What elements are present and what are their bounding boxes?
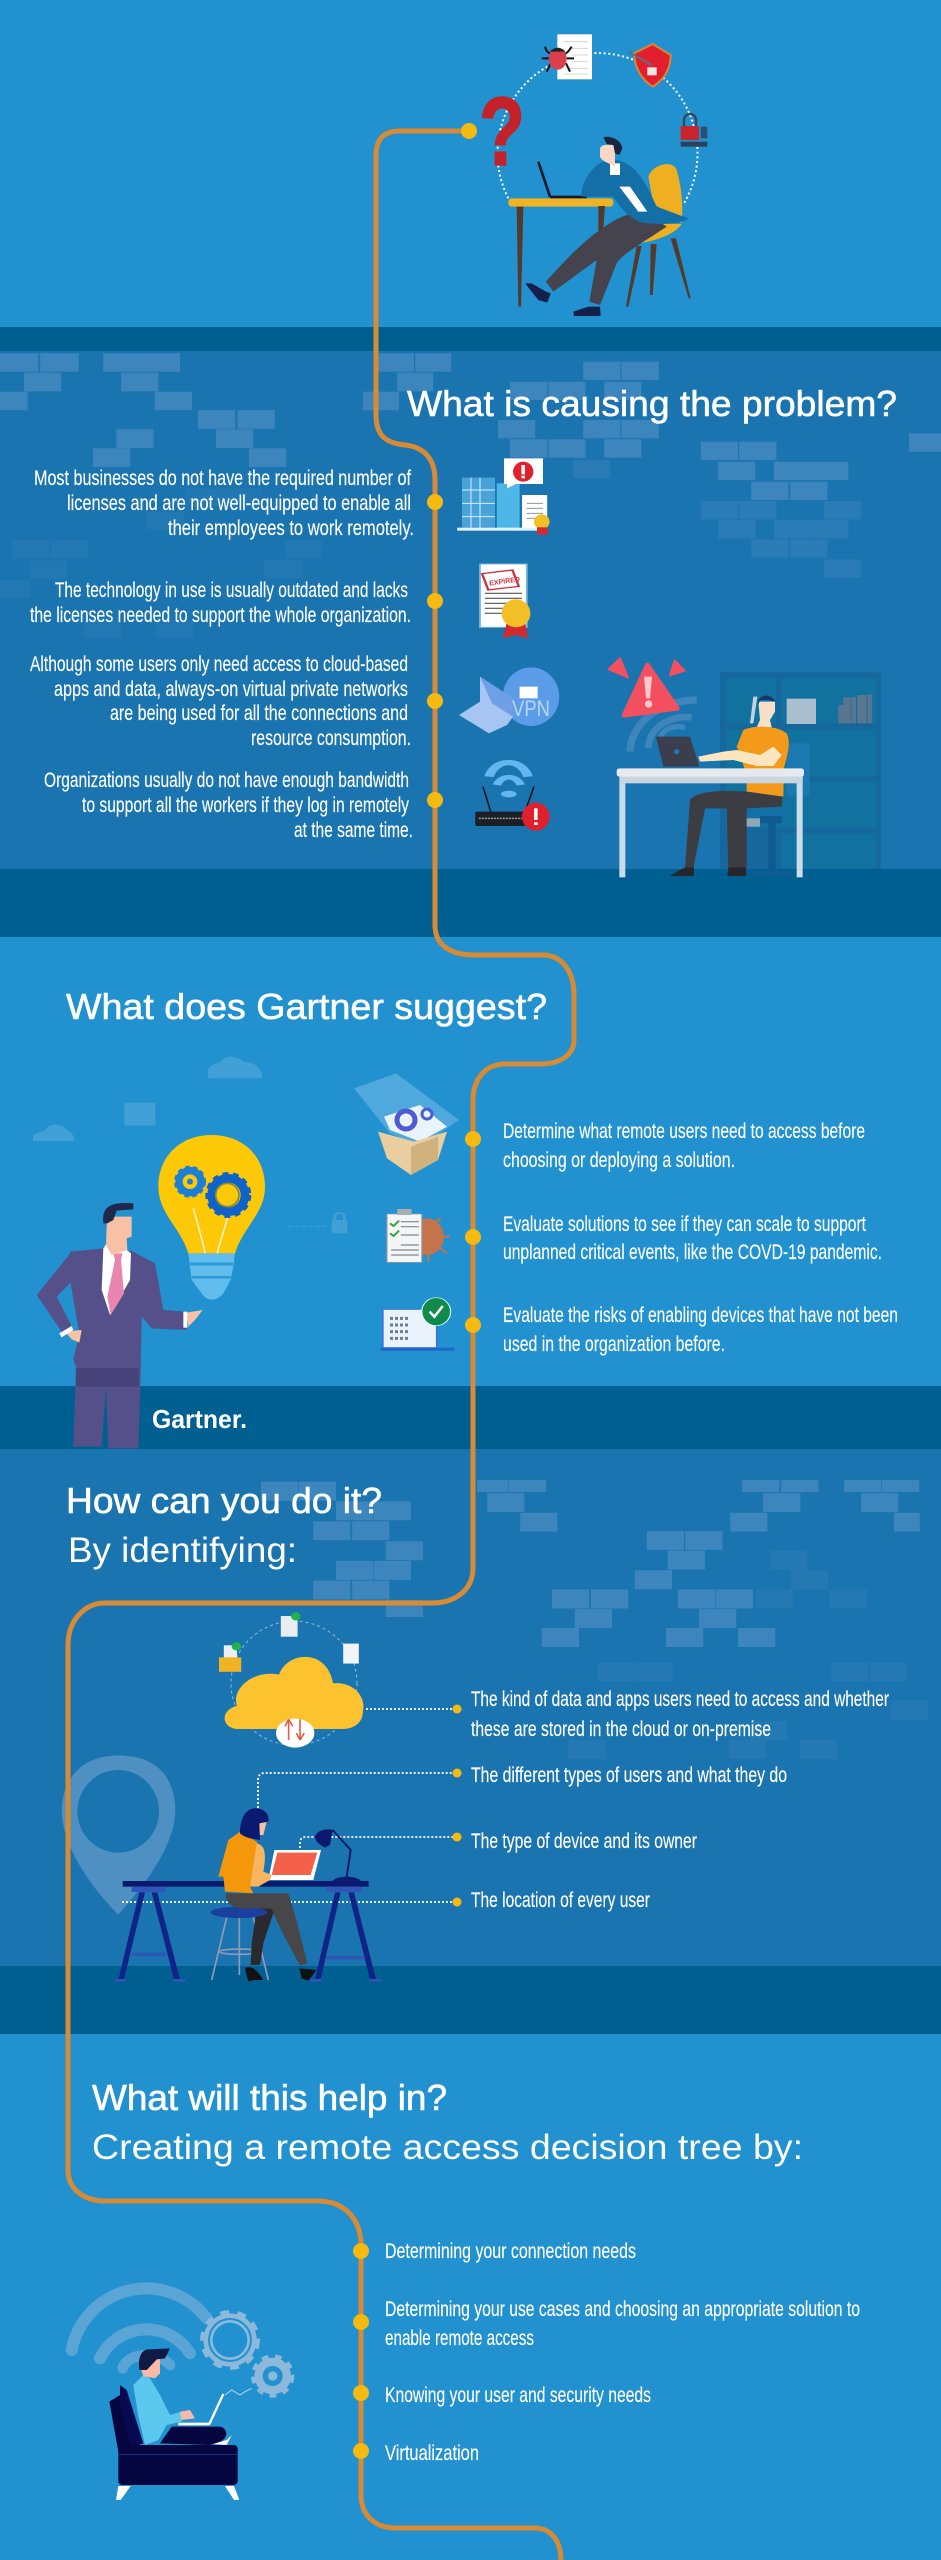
dotted connectors (122, 1709, 457, 1902)
text block: causes: at the same time. (294, 818, 413, 842)
text block: Gartner suggestions: choosing or deploying a solution. (503, 1148, 735, 1172)
text block: causes (30, 466, 414, 842)
text block: causes: are being used for all the connections and (110, 701, 408, 725)
icon: open box with gears (354, 1073, 459, 1175)
text block: decision tree items: Virtualization (385, 2441, 479, 2465)
illustration: man on armchair with wifi and gears (72, 2288, 292, 2500)
icon: expired licence (480, 564, 530, 638)
icon: expired licence: EXPIRED (489, 576, 520, 588)
icon: VPN laptop and globe: VPN (512, 696, 550, 721)
icon: clipboard and virus (387, 1209, 450, 1262)
illustration: employee at desk with alerts (609, 658, 881, 877)
icon: router with alert (475, 763, 550, 831)
timeline dots (353, 123, 481, 2459)
heading: What will this help in?: What will this help in? (92, 2077, 447, 2118)
text block: identification items: The different types of users and what they do (471, 1763, 787, 1787)
text block: decision tree items (385, 2239, 860, 2465)
text block: causes: Organizations usually do not have enough bandwidth (44, 768, 409, 792)
text block: causes: The technology in use is usually outdated and lacks (55, 578, 408, 602)
heading: How can you do it? By identifying:: How can you do it? (66, 1480, 382, 1521)
background map pin (62, 1756, 175, 1915)
illustration: man with idea light bulb (37, 1135, 265, 1448)
illustration: worried man at desk with threat icons (479, 34, 707, 316)
icon: VPN laptop and globe (459, 667, 559, 733)
text block: causes: the licenses needed to support the whole organization. (30, 603, 411, 627)
Gartner logo text: Gartner. (152, 1404, 247, 1434)
text block: decision tree items: Knowing your user and security needs (385, 2383, 651, 2407)
box gears (397, 1109, 432, 1129)
illustration: woman working at desk (114, 1808, 381, 1982)
orange timeline path (68, 131, 574, 2560)
text block: causes: resource consumption. (251, 726, 411, 750)
connector dots (452, 1704, 462, 1906)
icon: office buildings with alert (457, 458, 550, 535)
heading: How can you do it? By identifying:: By identifying: (68, 1531, 297, 1570)
heading: What will this help in? (92, 2077, 803, 2167)
text block: identification items: these are stored in the cloud or on-premise (471, 1717, 771, 1741)
text block: causes: Most businesses do not have the required number of (34, 466, 411, 490)
text block: causes: Although some users only need access to cloud-based (30, 652, 408, 676)
background clouds, chat bubble and lock (33, 1057, 347, 1233)
illustration: cloud with documents (219, 1612, 363, 1748)
text block: identification items (471, 1687, 889, 1912)
text block: Gartner suggestions: used in the organization before. (503, 1332, 725, 1356)
text block: decision tree items: Determining your connection needs (385, 2239, 636, 2263)
question mark icon: ? (479, 77, 525, 186)
text block: decision tree items: enable remote access (385, 2326, 534, 2350)
text block: Gartner suggestions (503, 1119, 898, 1356)
text block: causes: apps and data, always-on virtual private networks (54, 677, 408, 701)
heading: What does Gartner suggest?: What does Gartner suggest? (66, 986, 547, 1027)
heading: What is causing the problem?: What is causing the problem? (407, 383, 897, 424)
text block: causes: licenses and are not well-equipped to enable all (67, 491, 411, 515)
icon: laptop with check mark (380, 1298, 455, 1351)
text block: identification items: The type of device and its owner (471, 1829, 697, 1853)
heading: How can you do it? By identifying: (66, 1480, 382, 1570)
text block: causes: to support all the workers if they log in remotely (82, 793, 409, 817)
text block: causes: their employees to work remotely. (168, 516, 414, 540)
heading: What will this help in?: Creating a remote access decision tree by: (92, 2128, 803, 2167)
text block: identification items: The location of every user (471, 1888, 650, 1912)
